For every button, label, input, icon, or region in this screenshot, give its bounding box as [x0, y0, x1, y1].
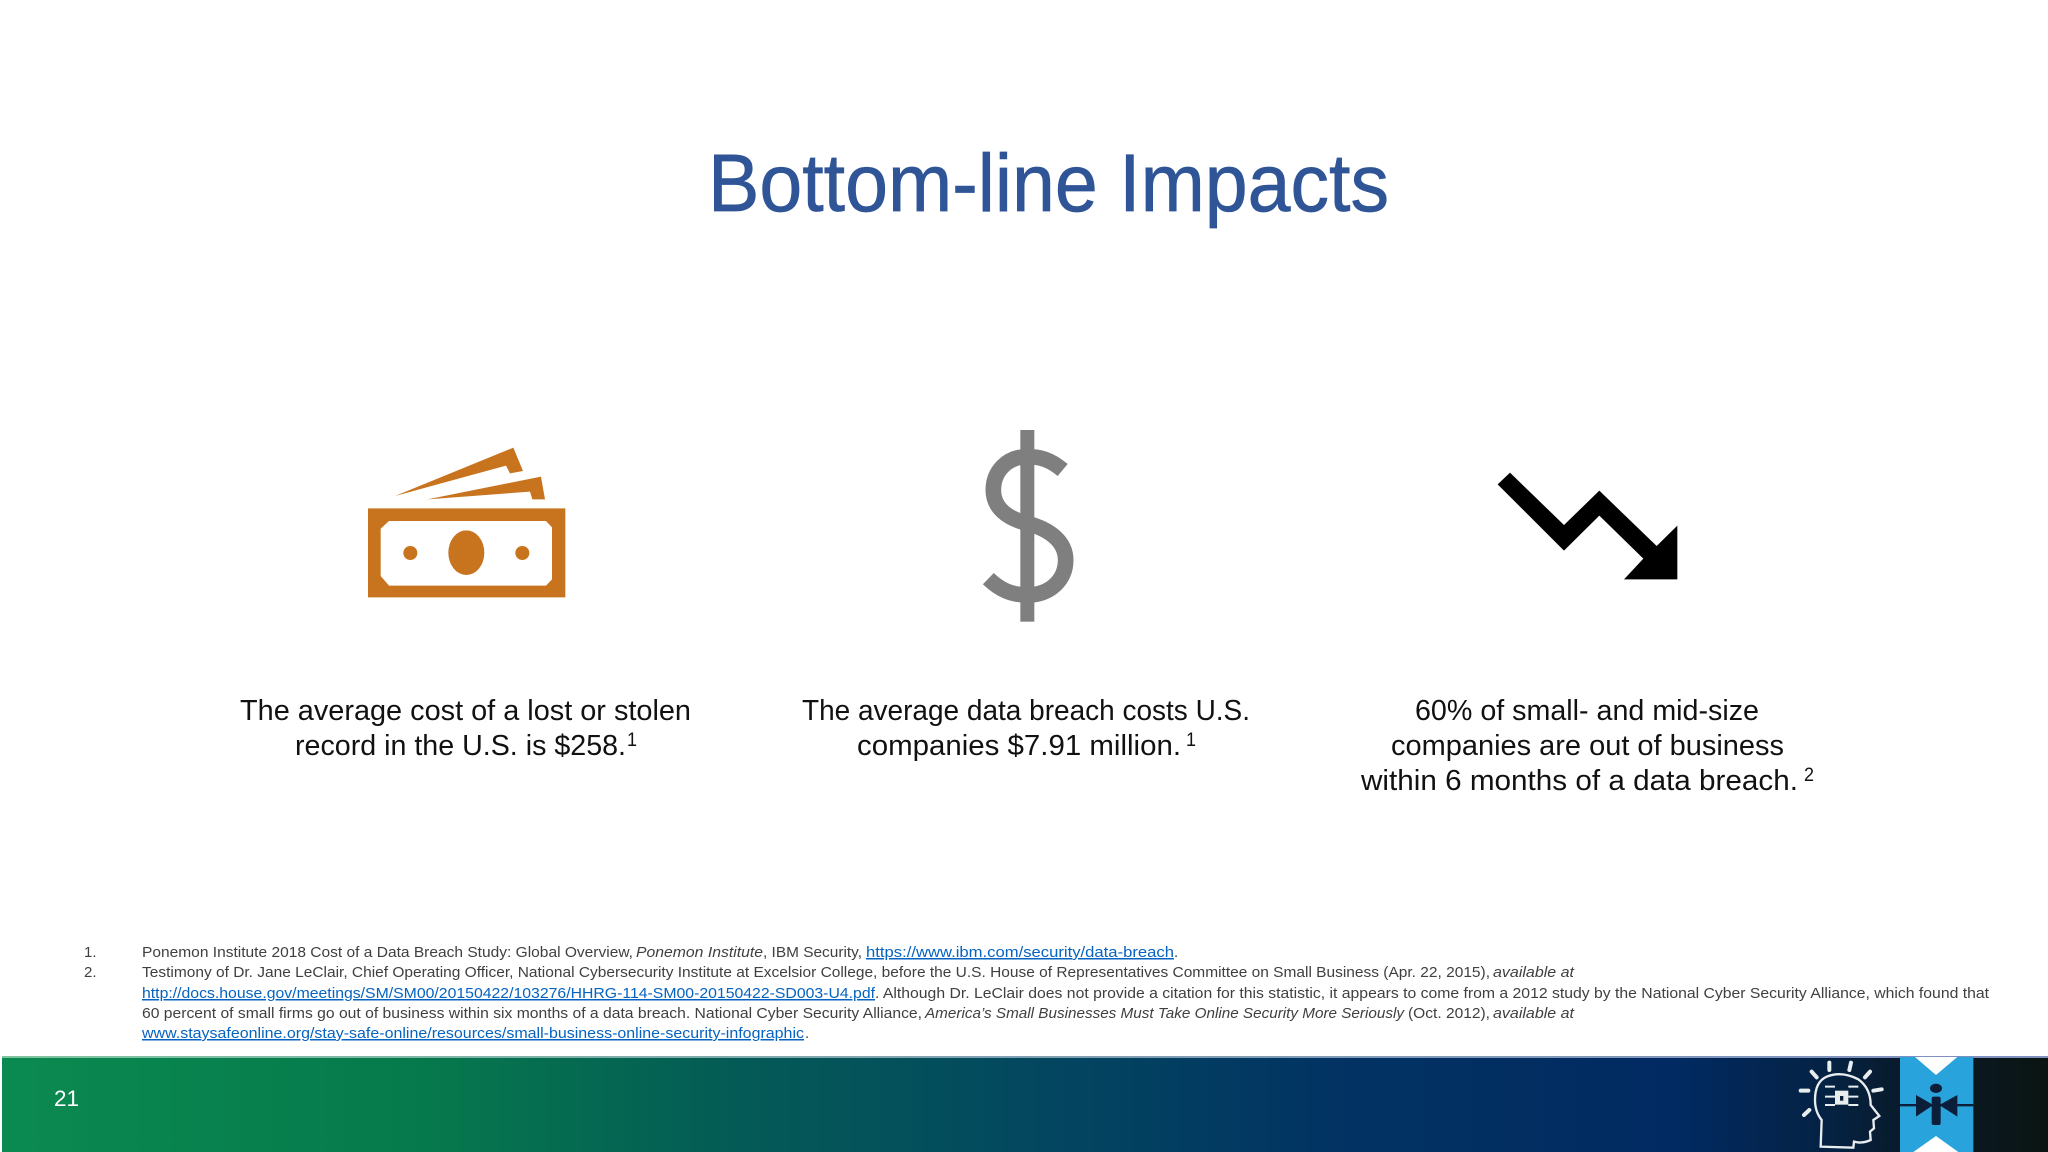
footnotes: America’s Small Businesses Must Take Online Security More Seriously	[924, 1005, 1406, 1022]
footnotes: . Although Dr. LeClair does not provide a citation for this statistic, it appears to come from a 2012 study by the National Cyber Security Alliance, which found that	[875, 985, 1990, 1002]
icon: head with lock chip	[1801, 1063, 1882, 1148]
title: Bottom-line Impacts	[708, 138, 1389, 229]
footnotes: , IBM Security,	[763, 944, 862, 961]
footnotes: .	[805, 1025, 809, 1042]
footnotes: 2.	[84, 964, 97, 981]
text: average breach cost	[802, 695, 1250, 762]
icon: downward trend arrow	[1498, 473, 1677, 579]
text: average breach cost: 1	[1186, 730, 1196, 751]
text: average breach cost: The average data breach costs U.S.	[802, 695, 1250, 727]
footnotes: www.staysafeonline.org/stay-safe-online/resources/small-business-online-security-infographic	[141, 1025, 805, 1042]
text: small business impact	[1360, 695, 1814, 797]
text: small business impact: 2	[1804, 765, 1814, 786]
footnotes: http://docs.house.gov/meetings/SM/SM00/20150422/103276/HHRG-114-SM00-20150422-SD003-U4.pdf	[142, 985, 876, 1002]
footnotes: 1.	[84, 944, 97, 961]
footnotes: 60 percent of small firms go out of business within six months of a data breach. National Cyber Security Alliance,	[142, 1005, 922, 1022]
text: small business impact: 60% of small- and mid-size	[1415, 695, 1759, 727]
footnotes: .	[1174, 944, 1178, 961]
footnotes	[84, 944, 1990, 1042]
logo: blue square with figure	[1900, 1057, 1973, 1152]
text: lost record cost: 1	[627, 730, 637, 751]
footnotes: Ponemon Institute 2018 Cost of a Data Breach Study: Global Overview,	[142, 944, 633, 961]
text: lost record cost: The average cost of a lost or stolen	[240, 695, 691, 727]
text: small business impact: within 6 months of a data breach.	[1360, 765, 1798, 797]
page number: 21	[54, 1086, 79, 1111]
icon: money bills	[368, 448, 565, 597]
text: average breach cost: companies $7.91 million.	[857, 730, 1181, 762]
text: small business impact: companies are out of business	[1391, 730, 1784, 762]
footer band	[2, 1056, 2048, 1152]
footnotes: (Oct. 2012),	[1408, 1005, 1490, 1022]
footnotes: Testimony of Dr. Jane LeClair, Chief Operating Officer, National Cybersecurity Institute at Excelsior College, before the U.S. House of Representatives Committee on Small Business (Apr. 22, 2015),	[142, 964, 1490, 981]
icon: dollar sign	[988, 430, 1066, 622]
footnotes: available at	[1493, 964, 1575, 981]
footnotes: https://www.ibm.com/security/data-breach	[866, 944, 1174, 961]
footnotes: available at	[1493, 1005, 1575, 1022]
text: lost record cost: record in the U.S. is $258.	[295, 730, 626, 762]
text: lost record cost	[240, 695, 691, 762]
footnotes: Ponemon Institute	[636, 944, 763, 961]
